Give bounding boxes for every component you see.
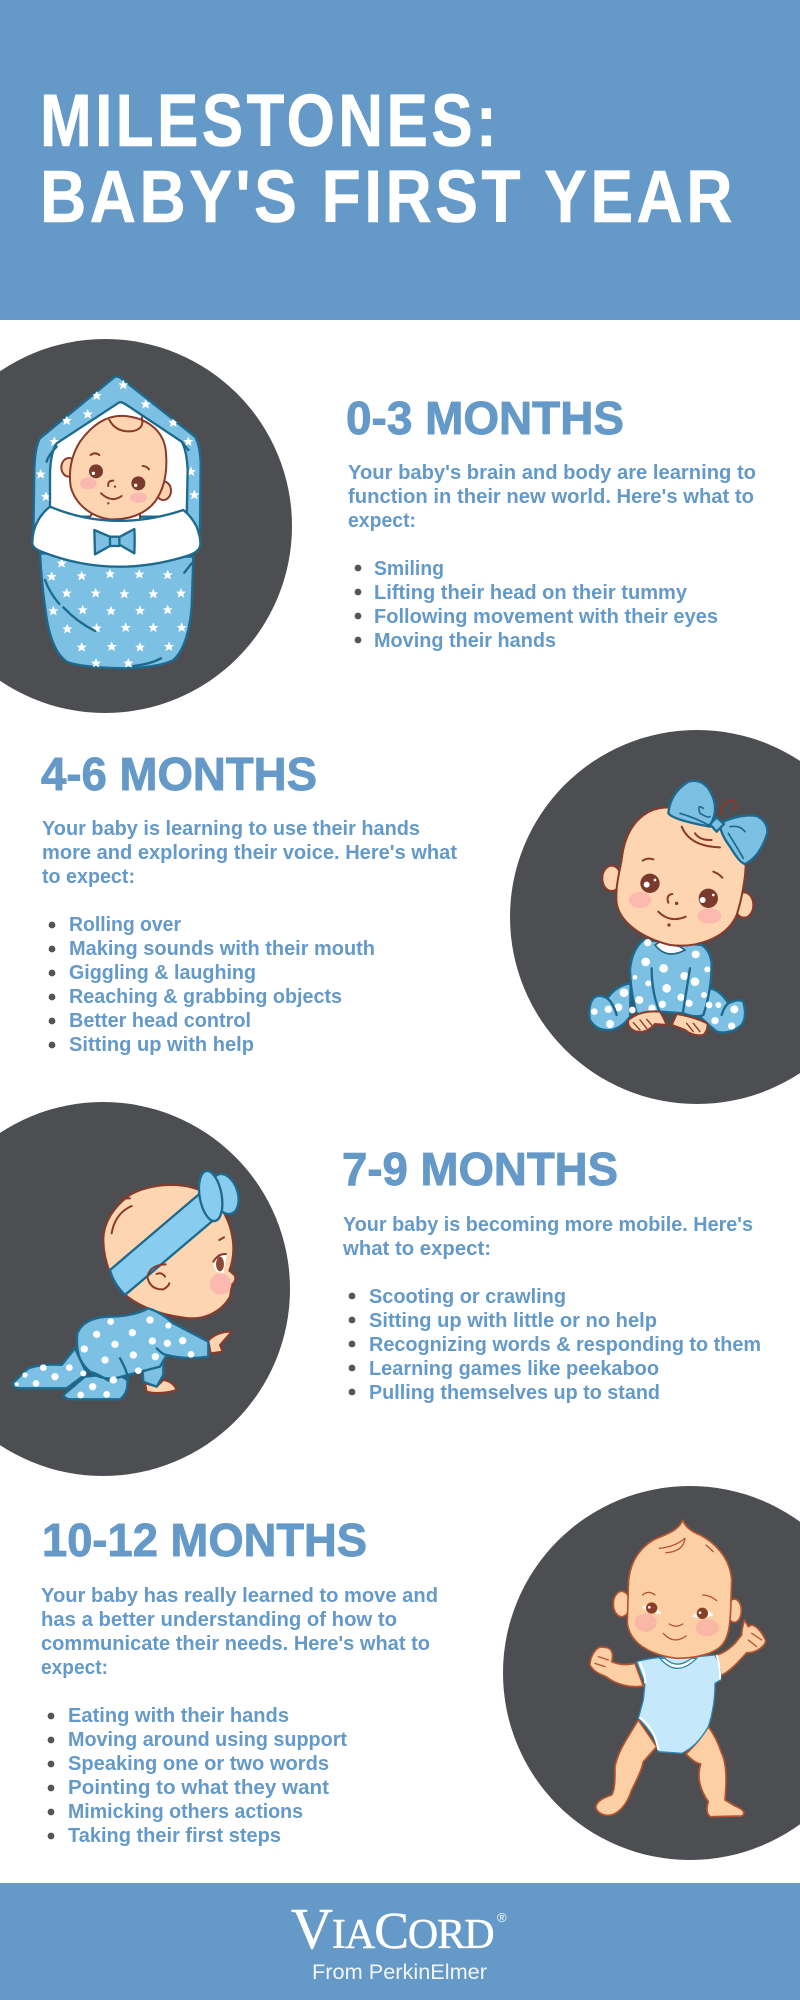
description: function in their new world. Here's what to [348,486,754,508]
bullet list: Reaching & grabbing objects [69,986,342,1008]
bullet list [355,558,718,652]
panel: 7-9 months image [0,1102,290,1476]
description [42,818,457,888]
bullet list [49,914,375,1056]
panel: 10-12 months image [503,1486,800,1860]
description: more and exploring their voice. Here's what [42,842,457,864]
title [40,79,736,238]
bullet list: Speaking one or two words [68,1753,329,1775]
bullet list: Taking their first steps [68,1825,281,1847]
tagline: From PerkinElmer [312,1961,487,1984]
heading: 7-9 MONTHS [342,1143,618,1195]
panel: 4-6 months image [510,730,800,1104]
icon: swaddled baby [32,376,201,668]
bullet list: Sitting up with little or no help [369,1310,657,1332]
icon: standing baby in onesie [590,1520,766,1817]
panel: 0-3 months image [0,339,292,713]
bullet list: Giggling & laughing [69,962,256,984]
description [342,1214,753,1260]
bullet list: Scooting or crawling [369,1286,566,1308]
description [41,1585,438,1679]
bullet list [349,1286,761,1404]
bullet list: Sitting up with help [69,1034,254,1056]
logo: ViaCord: ® [497,1910,507,1925]
icon: sitting baby with bow [589,781,767,1035]
description: Your baby's brain and body are learning to [348,462,756,484]
description: expect: [41,1657,108,1679]
panel: 10-12 months text [41,1514,438,1847]
bullet list: Making sounds with their mouth [69,938,375,960]
bullet list: Eating with their hands [68,1705,289,1727]
description: Your baby is becoming more mobile. Here's [343,1214,753,1236]
description: Your baby has really learned to move and [41,1585,438,1607]
bullet list: Rolling over [69,914,181,936]
bullet list: Better head control [69,1010,251,1032]
description: to expect: [42,866,135,888]
heading: 4-6 MONTHS [41,748,317,800]
description: expect: [348,510,416,532]
description: communicate their needs. Here's what to [41,1633,430,1655]
heading: 0-3 MONTHS [346,392,624,444]
icon: crawling baby with headband [13,1169,243,1399]
bullet list: Pulling themselves up to stand [369,1382,660,1404]
description: Your baby is learning to use their hands [42,818,420,840]
description: has a better understanding of how to [41,1609,397,1631]
bullet list: Mimicking others actions [68,1801,303,1823]
description [348,462,756,532]
logo: ViaCord: VIACORD [291,1896,494,1961]
bullet list: Recognizing words & responding to them [369,1334,761,1356]
bullet list [48,1705,347,1847]
header banner [0,0,800,320]
heading: 10-12 MONTHS [42,1514,367,1566]
panel: 7-9 months text [342,1143,761,1404]
bullet list: Moving around using support [68,1729,347,1751]
title: MILESTONES: [40,79,500,162]
bullet list: Pointing to what they want [68,1777,329,1799]
footer banner [0,1883,800,2000]
panel: 4-6 months text [41,748,457,1056]
bullet list: Lifting their head on their tummy [374,582,688,604]
bullet list: Learning games like peekaboo [369,1358,659,1380]
description: what to expect: [342,1238,491,1260]
panel: 0-3 months text [346,392,756,652]
bullet list: Smiling [374,558,444,580]
bullet list: Moving their hands [374,630,556,652]
bullet list: Following movement with their eyes [374,606,718,628]
